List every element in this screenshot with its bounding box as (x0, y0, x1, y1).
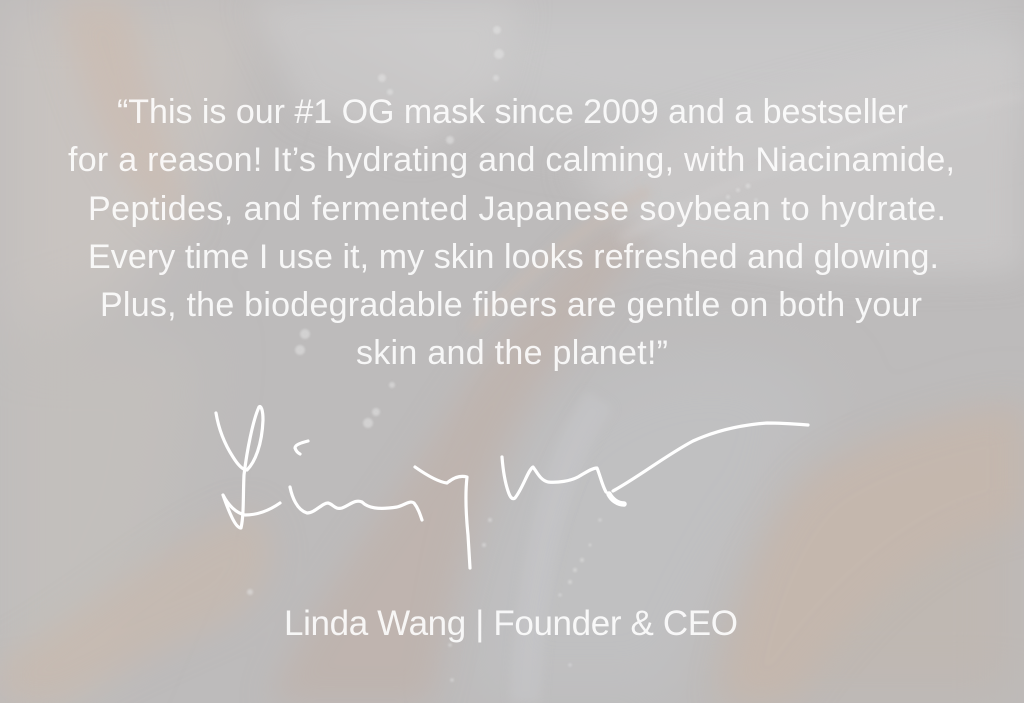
quote text: Plus, the biodegradable fibers are gentle on both your (100, 286, 922, 324)
quote text (68, 93, 955, 372)
signature (216, 407, 808, 568)
right pale silk (570, 40, 1024, 274)
bottom-left peach (0, 510, 272, 703)
diagonal peach band (270, 220, 660, 703)
quote text: “This is our #1 OG mask since 2009 and a bestseller (117, 93, 908, 131)
quote text: Every time I use it, my skin looks refreshed and glowing. (88, 238, 939, 276)
peach top-left streak (60, 0, 190, 230)
top mid pale (250, 0, 520, 150)
bottom-right lower peach (720, 405, 1024, 703)
glittering sparkles (247, 26, 758, 682)
quote text: for a reason! It’s hydrating and calming, with Niacinamide, (68, 141, 955, 179)
quote text: skin and the planet!” (356, 334, 668, 372)
quote text: Peptides, and fermented Japanese soybean to hydrate. (88, 190, 946, 228)
attribution: Linda Wang | Founder & CEO (284, 604, 738, 643)
